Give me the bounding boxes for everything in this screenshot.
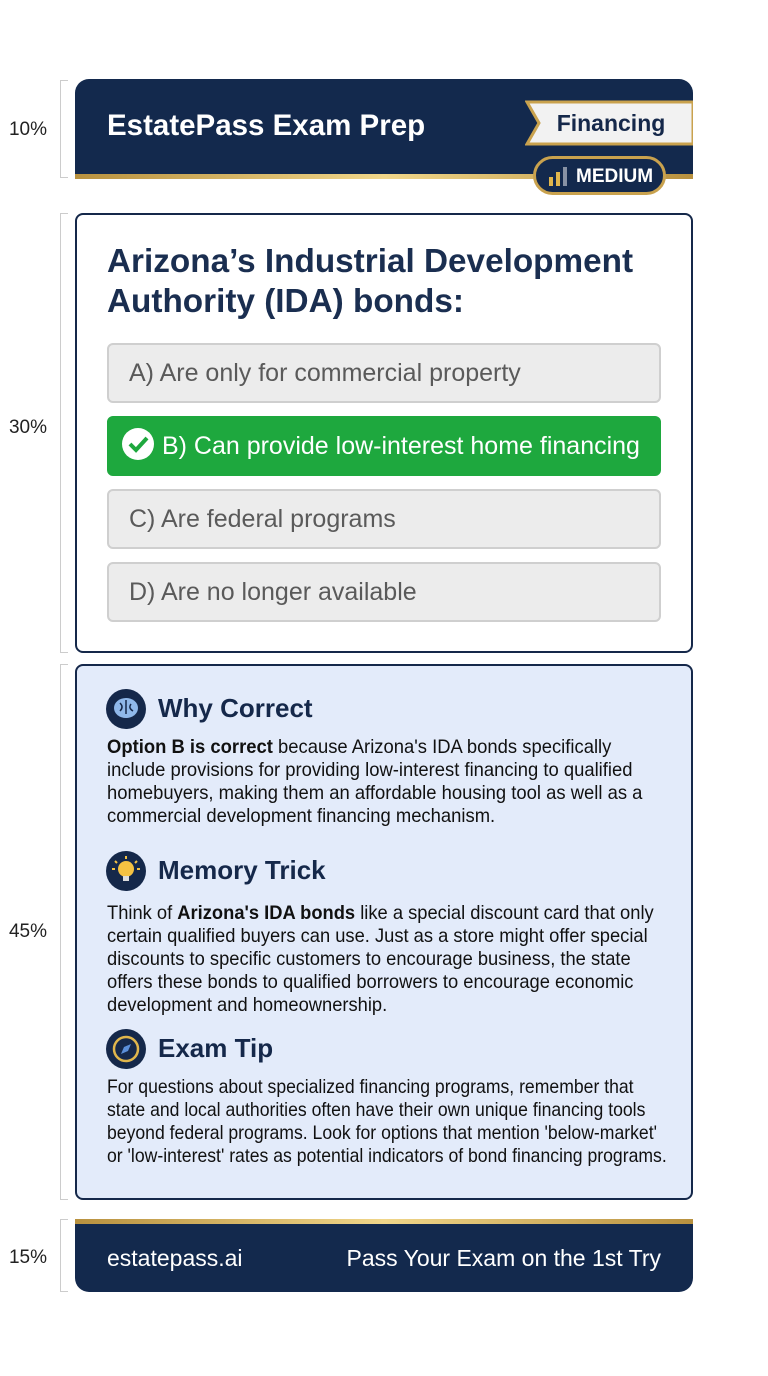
text: 30% (9, 417, 47, 438)
body: memory trick: certain qualified buyers can use. Just as a store might offer special (107, 925, 648, 947)
body: why correct: commercial development financing mechanism. (107, 805, 495, 827)
icon: brain (106, 689, 146, 729)
option D (107, 562, 661, 622)
option B correct: B) Can provide low-interest home financing (162, 432, 640, 460)
bracket 45% (60, 664, 68, 1200)
body: memory trick (107, 902, 654, 1016)
question card (75, 213, 693, 653)
difficulty pill: MEDIUM (576, 166, 653, 187)
bracket 30% (60, 213, 68, 653)
header (75, 79, 693, 179)
body: exam tip: or 'low-interest' rates as potential indicators of bond financing programs. (107, 1145, 667, 1167)
text: 45% (9, 921, 47, 942)
heading: Why Correct: Why Correct (158, 693, 313, 723)
footer left text: estatepass.ai (107, 1245, 243, 1271)
option B correct (107, 416, 661, 476)
option C: C) Are federal programs (129, 505, 396, 533)
question title: Arizona’s Industrial Development (107, 243, 633, 280)
question title (107, 243, 633, 320)
body: memory trick: discounts to specific customers to encourage business, the state (107, 948, 631, 970)
difficulty pill (533, 156, 666, 195)
body: why correct: include provisions for providing low-interest financing to qualified (107, 759, 632, 781)
question title: Authority (IDA) bonds: (107, 283, 464, 320)
option D: D) Are no longer available (129, 578, 417, 606)
heading: Exam Tip: Exam Tip (158, 1033, 273, 1063)
icon: bulb (106, 851, 146, 891)
text: 15% (9, 1247, 47, 1268)
footer right text: Pass Your Exam on the 1st Try (346, 1245, 661, 1271)
option C (107, 489, 661, 549)
body: exam tip: state and local authorities often have their own unique financing tools (107, 1099, 645, 1121)
bracket 15% (60, 1219, 68, 1292)
option A: A) Are only for commercial property (129, 359, 521, 387)
header title: EstatePass Exam Prep (107, 109, 425, 142)
footer (75, 1219, 693, 1292)
body: exam tip: beyond federal programs. Look for options that mention 'below-market' (107, 1122, 657, 1144)
icon: compass (106, 1029, 146, 1069)
explanation panel (75, 664, 693, 1200)
body: why correct (107, 736, 642, 827)
body: memory trick: Think of Arizona's IDA bonds like a special discount card that only (107, 902, 654, 924)
body: memory trick: development and homeownership. (107, 994, 387, 1016)
body: why correct: Option B is correct because Arizona's IDA bonds specifically (107, 736, 611, 758)
body: exam tip (107, 1076, 667, 1167)
body: memory trick: offers these bonds to qualified borrowers to encourage economic (107, 971, 633, 993)
ribbon: Financing: Financing (557, 110, 665, 136)
ribbon: Financing (525, 100, 693, 146)
body: why correct: homebuyers, making them an affordable housing tool as well as a (107, 782, 642, 804)
text: 10% (9, 119, 47, 140)
option A (107, 343, 661, 403)
body: exam tip: For questions about specialized financing programs, remember that (107, 1076, 634, 1098)
bracket 10% (60, 80, 68, 178)
heading: Memory Trick: Memory Trick (158, 855, 326, 885)
